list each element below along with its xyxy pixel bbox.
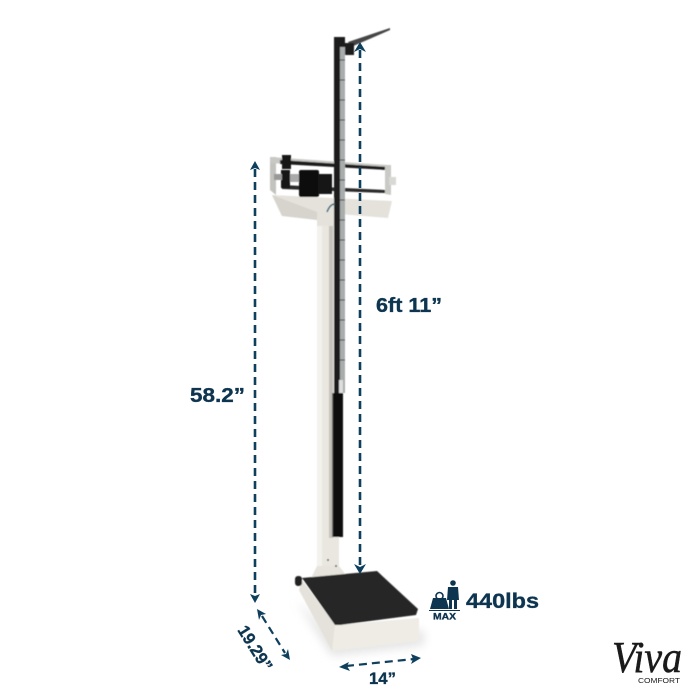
scale product bbox=[270, 28, 424, 656]
balance beams bbox=[270, 155, 396, 197]
label: 14: 14” bbox=[369, 669, 396, 688]
logo: Viva Comfort: COMFORT bbox=[638, 676, 680, 685]
icon: person bbox=[447, 580, 459, 609]
tray bbox=[272, 195, 392, 226]
logo: Viva Comfort: Viva bbox=[612, 633, 682, 682]
label: 440lbs: 440lbs bbox=[466, 590, 539, 613]
height pointer bbox=[345, 28, 390, 55]
base platform bbox=[295, 571, 419, 651]
icon: weight bbox=[430, 592, 449, 609]
icon: tray logo mark bbox=[327, 204, 335, 212]
max capacity icon: MAX bbox=[433, 612, 456, 622]
measuring rod bbox=[332, 37, 345, 537]
arrow: 14 width bbox=[339, 654, 421, 671]
label: 6ft 11: 6ft 11” bbox=[376, 295, 442, 317]
max capacity icon bbox=[429, 580, 460, 622]
arrow: 6ft 11 height bbox=[354, 42, 366, 574]
arrow: 58.2 inch height bbox=[250, 161, 260, 603]
column bbox=[310, 212, 350, 580]
arrow: 19.29 depth bbox=[257, 609, 290, 660]
label: 19.29: 19.29” bbox=[234, 622, 276, 675]
base shadow bbox=[296, 600, 424, 656]
label: 58.2: 58.2” bbox=[190, 385, 245, 407]
